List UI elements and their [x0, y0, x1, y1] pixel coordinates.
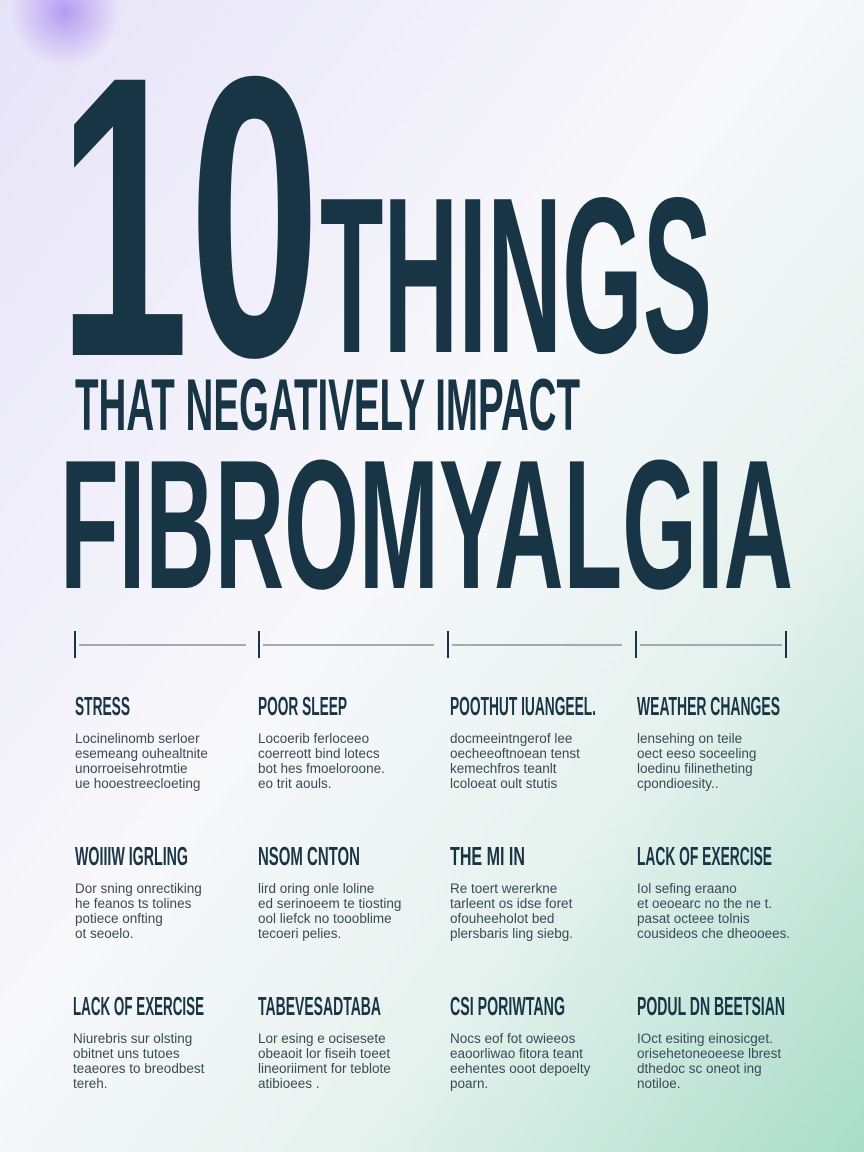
item 1: unorroeisehrotmtie — [75, 761, 188, 776]
item 5: potiece onfting — [75, 911, 163, 926]
item 1: esemeang ouhealtnite — [75, 746, 208, 761]
item 8: pasat octeee tolnis — [637, 911, 750, 926]
item 3: docmeeintngerof lee — [450, 731, 572, 746]
item 4: loedinu filinetheting — [637, 761, 753, 776]
item 3: POOTHUT IUANGEEL. — [450, 691, 596, 721]
item 1: Locinelinomb serloer — [75, 731, 200, 746]
item 11: CSI PORIWTANG — [450, 991, 565, 1021]
item 7: THE MI IN — [450, 841, 525, 871]
item 8: Iol sefing eraano — [637, 881, 737, 896]
item 12: notiloe. — [637, 1076, 681, 1091]
item 7: Re toert wererkne — [450, 881, 557, 896]
item 12: orisehetoneoeese lbrest — [637, 1046, 781, 1061]
item 2: coerreott bind lotecs — [258, 746, 380, 761]
item 12 — [637, 991, 785, 1091]
item 4: lensehing on teile — [637, 731, 742, 746]
item 6 — [258, 841, 401, 941]
item 4: oect eeso soceeling — [637, 746, 756, 761]
item 7: tarleent os idse foret — [450, 896, 573, 911]
item 11: poarn. — [450, 1076, 488, 1091]
item 6: tecoeri pelies. — [258, 926, 341, 941]
item 2: Locoerib ferloceeo — [258, 731, 369, 746]
item 8: et oeoearc no the ne t. — [637, 896, 772, 911]
item 2: bot hes fmoeloroone. — [258, 761, 385, 776]
item 9: Niurebris sur olsting — [73, 1031, 192, 1046]
item 6: lird oring onle loline — [258, 881, 374, 896]
item 4: cpondioesity.. — [637, 776, 719, 791]
item 5: WOIIIW IGRLING — [75, 841, 188, 871]
item 12: IOct esiting einosicget. — [637, 1031, 773, 1046]
item 10: obeaoit lor fiseih toeet — [258, 1046, 390, 1061]
item 8: cousideos che dheooees. — [637, 926, 790, 941]
item 6: ool liefck no toooblime — [258, 911, 392, 926]
title: 10: 10 — [58, 0, 320, 440]
item 1: STRESS — [75, 691, 130, 721]
item 7 — [450, 841, 573, 941]
item 3 — [450, 691, 596, 791]
item 11 — [450, 991, 591, 1091]
item 5: ot seoelo. — [75, 926, 134, 941]
item 4 — [637, 691, 780, 791]
item 9: tereh. — [73, 1076, 108, 1091]
item 3: lcoloeat oult stutis — [450, 776, 558, 791]
item 2 — [258, 691, 385, 791]
item 5 — [75, 841, 202, 941]
item 3: oecheeoftnoean tenst — [450, 746, 580, 761]
item 11: Nocs eof fot owieeos — [450, 1031, 576, 1046]
item 10: atibioees . — [258, 1076, 320, 1091]
item 10: TABEVESADTABA — [258, 991, 381, 1021]
item 7: plersbaris ling siebg. — [450, 926, 573, 941]
item 2: POOR SLEEP — [258, 691, 347, 721]
item 7: ofouheeholot bed — [450, 911, 554, 926]
item 11: eaoorliwao fitora teant — [450, 1046, 583, 1061]
item 1 — [75, 691, 208, 791]
item 5: Dor sning onrectiking — [75, 881, 202, 896]
item 2: eo trit aouls. — [258, 776, 332, 791]
item 9: obitnet uns tutoes — [73, 1046, 180, 1061]
item 9: LACK OF EXERCISE — [73, 991, 204, 1021]
item 11: eehentes ooot depoelty — [450, 1061, 591, 1076]
item 5: he feanos ts tolines — [75, 896, 192, 911]
item 9 — [73, 991, 205, 1091]
item 8 — [637, 841, 790, 941]
item 10 — [258, 991, 391, 1091]
timeline divider — [75, 631, 786, 658]
item 9: teaeores to breodbest — [73, 1061, 205, 1076]
item 12: dthedoc sc oneot ing — [637, 1061, 762, 1076]
item 10: Lor esing e ocisesete — [258, 1031, 386, 1046]
item 10: lineoriiment for teblote — [258, 1061, 391, 1076]
item 1: ue hooestreecloeting — [75, 776, 200, 791]
item 6: ed serinoeem te tiosting — [258, 896, 401, 911]
item 3: kemechfros teanlt — [450, 761, 557, 776]
item 6: NSOM CNTON — [258, 841, 360, 871]
